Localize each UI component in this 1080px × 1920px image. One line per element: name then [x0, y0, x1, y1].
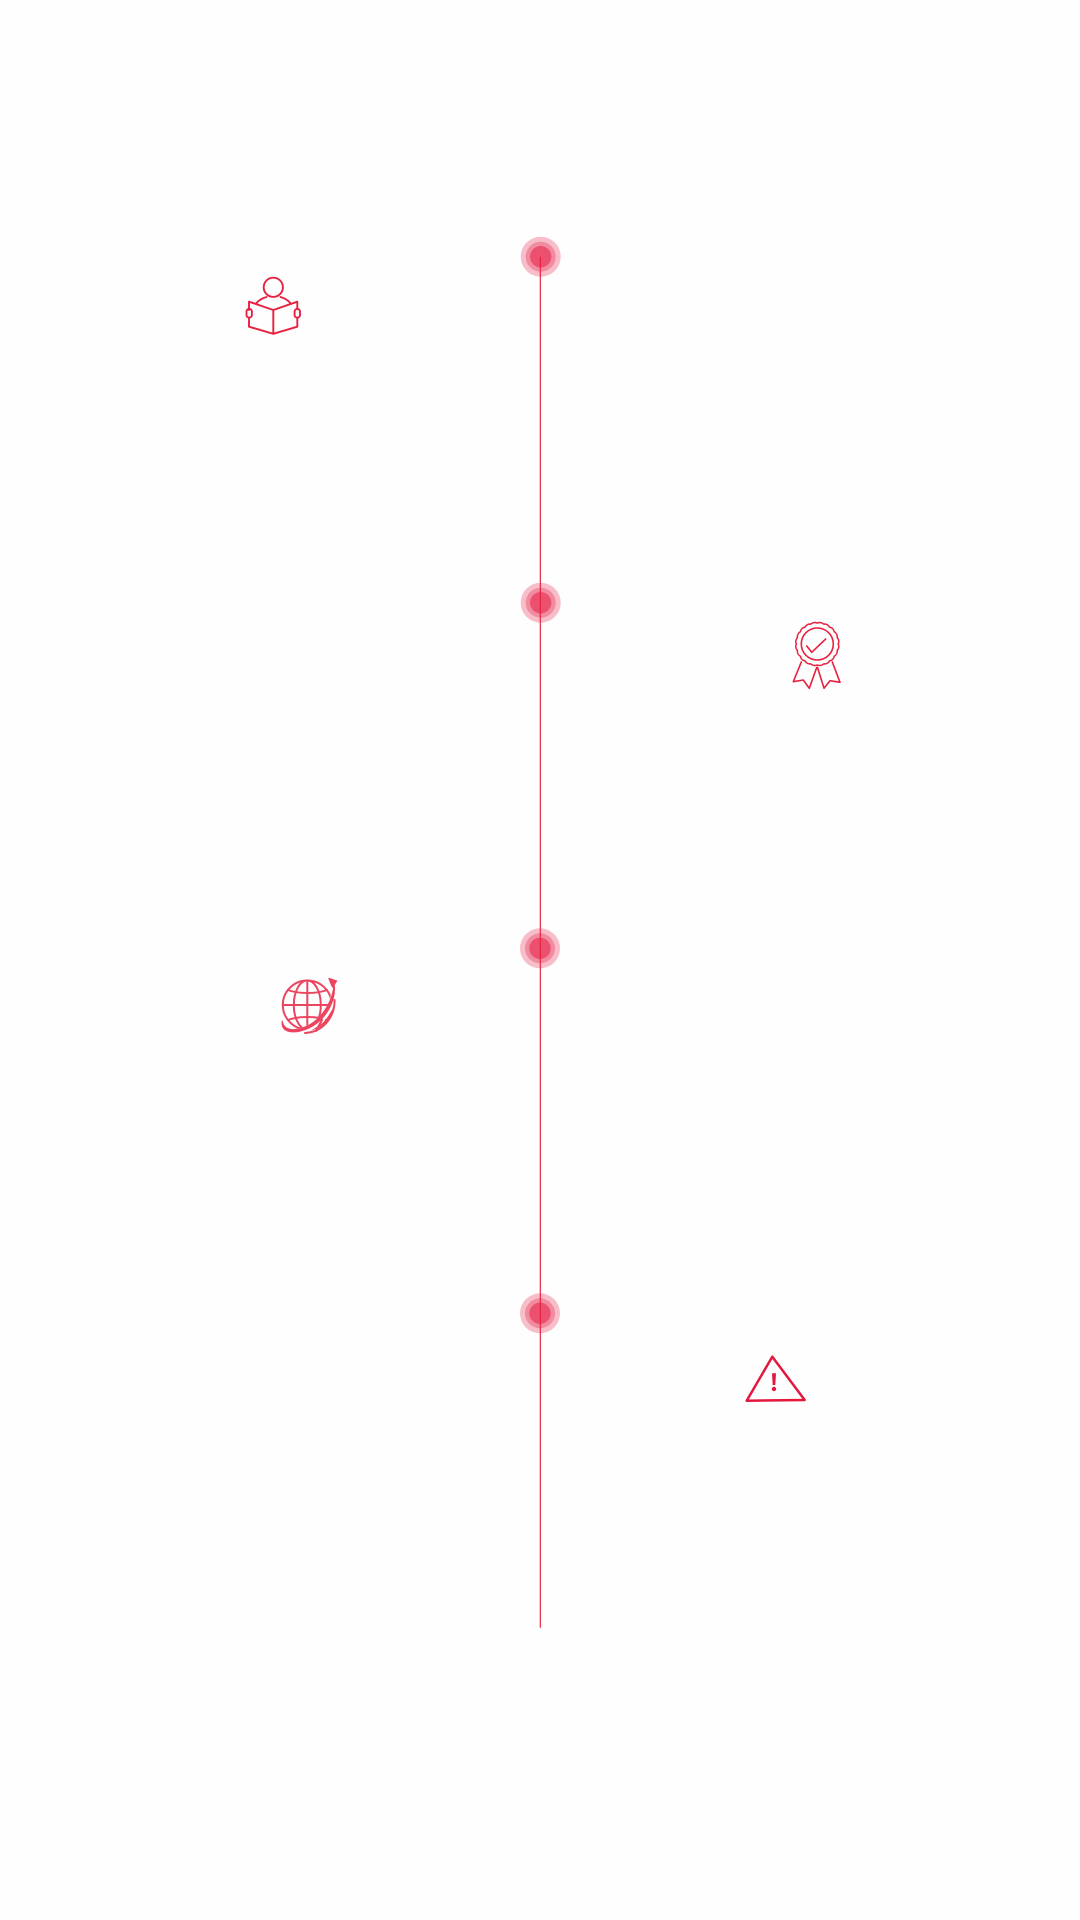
node: timeline marker 1	[521, 237, 561, 277]
node: timeline marker 4	[520, 1293, 560, 1333]
node: timeline marker 2	[521, 583, 561, 623]
icon: globe with orbit arrow	[281, 978, 336, 1033]
icon: warning triangle	[747, 1357, 805, 1401]
icon: person reading a book	[246, 278, 300, 334]
icon: award ribbon with check	[793, 623, 840, 688]
timeline vertical line	[540, 257, 541, 1628]
node: timeline marker 3	[520, 928, 560, 968]
